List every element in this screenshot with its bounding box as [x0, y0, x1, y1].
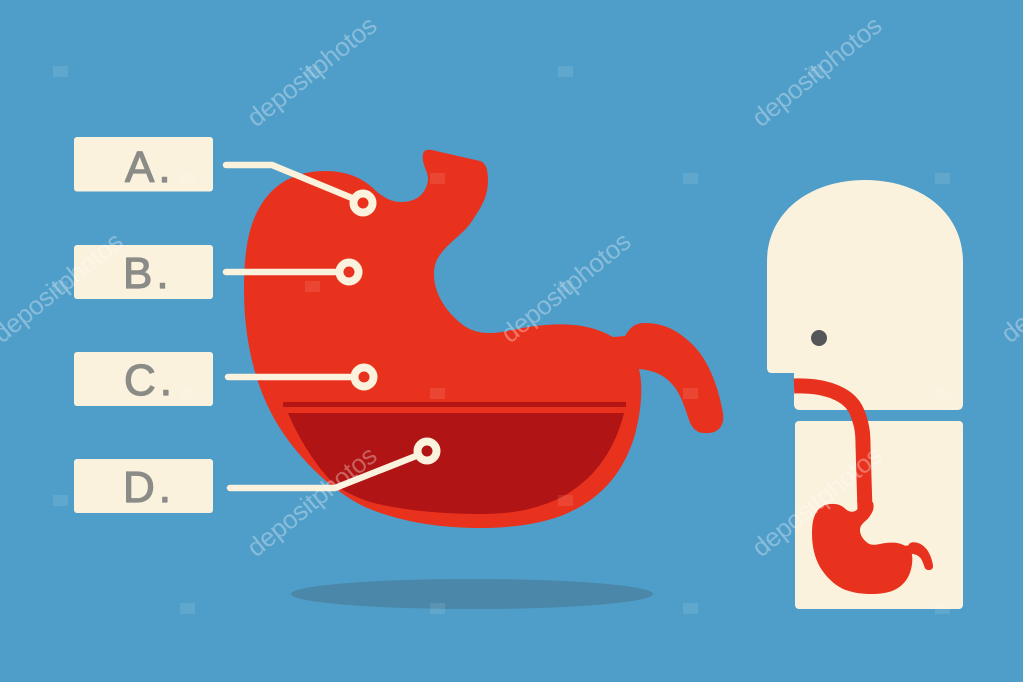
- head: [767, 180, 963, 410]
- label D: D.: [123, 463, 175, 512]
- label B: B.: [123, 249, 173, 298]
- leader line D: [230, 442, 436, 488]
- stomach body: [244, 150, 723, 528]
- label C: C.: [124, 356, 176, 405]
- watermarks: depositphotos: [746, 10, 888, 133]
- watermarks: depositphotos: [241, 440, 383, 563]
- leader line C: [228, 368, 374, 386]
- small stomach: [812, 499, 933, 594]
- label A: A.: [125, 143, 175, 192]
- leader line A: [226, 165, 372, 212]
- torso: [795, 421, 963, 609]
- stomach fluid: [288, 413, 624, 514]
- watermark camera marks: [53, 66, 950, 614]
- stomach illustration: [244, 150, 723, 528]
- watermarks: depositphotos: [495, 226, 637, 349]
- leader line B: [226, 262, 358, 282]
- label A: [74, 137, 213, 192]
- eye: [811, 330, 827, 346]
- esophagus: [794, 386, 865, 510]
- stomach fluid level line: [283, 402, 626, 407]
- label B: [74, 245, 213, 299]
- label C: [74, 352, 213, 406]
- watermarks: depositphotos: [746, 440, 888, 563]
- label D: [74, 459, 213, 513]
- floor shadow: [291, 579, 653, 609]
- watermarks: depositphotos: [241, 10, 383, 133]
- human figure diagram: [767, 180, 963, 609]
